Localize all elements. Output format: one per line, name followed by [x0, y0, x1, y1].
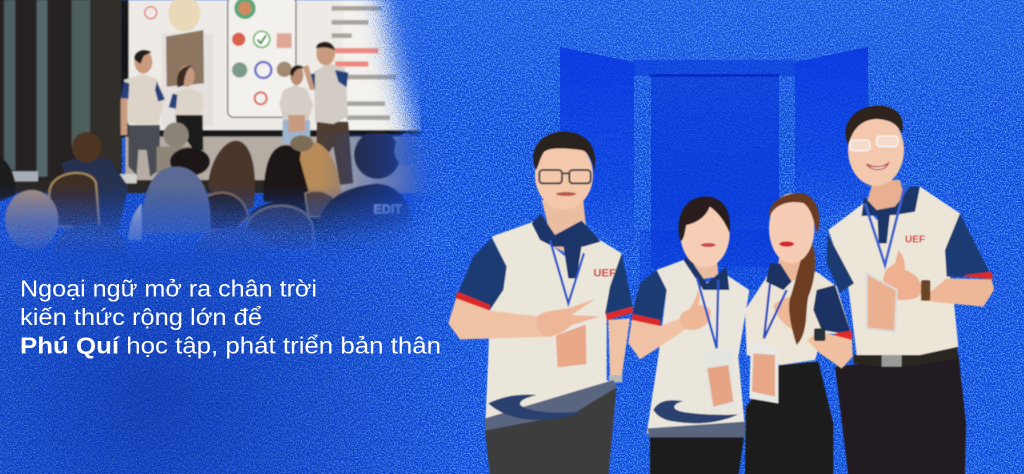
- audience: [0, 122, 419, 287]
- students group: [448, 106, 994, 474]
- headline text: Phú Quí học tập, phát triển bản thân: [20, 332, 441, 358]
- wall and table: [11, 137, 459, 193]
- curtain: [0, 0, 122, 185]
- photo: presentation on stage: [0, 0, 460, 287]
- headline text: kiến thức rộng lớn để: [20, 304, 262, 330]
- student 3: [745, 193, 853, 474]
- student 4, far right: [827, 106, 994, 474]
- projection screen: [122, 0, 422, 137]
- student 1: UEF: [593, 268, 616, 280]
- grain over photo fade: [0, 198, 450, 260]
- presenter 3: [279, 65, 313, 145]
- presenter 2: [169, 65, 204, 150]
- presenter 1: [121, 50, 165, 177]
- doorway graphic: [560, 47, 868, 290]
- student 1: [448, 132, 633, 474]
- student 4, far right: UEF: [905, 235, 925, 246]
- headline text: Ngoại ngữ mở ra chân trời: [20, 276, 317, 302]
- audience: EDIT: [373, 202, 402, 216]
- headline text: [20, 276, 441, 358]
- student 2: [628, 197, 749, 474]
- presenter 4: [303, 41, 353, 185]
